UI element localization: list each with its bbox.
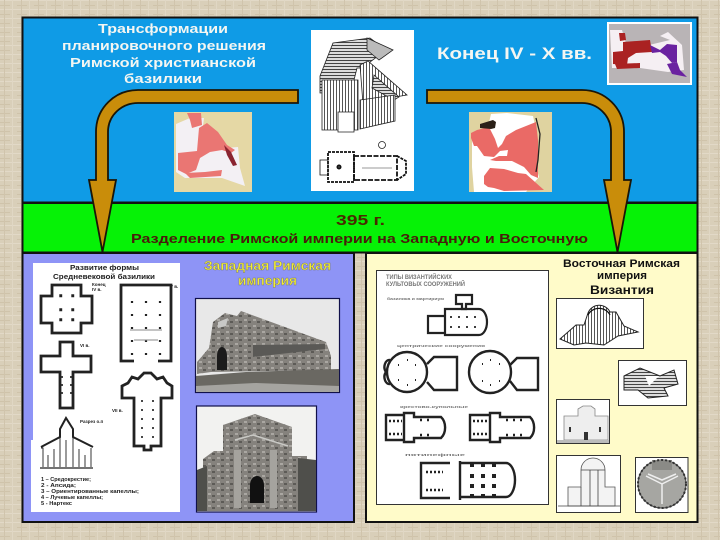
plans sheet: medieval basilica (31, 263, 180, 512)
sheet heading: ТИПЫ ВИЗАНТИЙСКИХ (386, 273, 452, 281)
sheet heading (53, 265, 155, 281)
title (62, 22, 266, 86)
legend: 4 – Лучевые капеллы; (41, 495, 103, 501)
sheet heading: базилика и мартириум (387, 296, 444, 301)
sheet heading: крестово-купольные (400, 404, 469, 409)
legend: 3 – Ориентированные капеллы; (41, 489, 139, 495)
image: church facade (556, 400, 610, 444)
drawing: basilica perspective (320, 38, 407, 148)
plan: central cross (41, 285, 92, 333)
division text: Разделение Римской империи на Западную и Восточную (131, 232, 588, 246)
plan: basilica with martyrium (428, 295, 487, 335)
plan: cross-domed church right (470, 413, 534, 442)
plan period labels: Конец (92, 282, 106, 287)
date heading: 395 г. (336, 212, 385, 229)
plan period labels (80, 282, 178, 424)
legend: 1 – Средокрестие; (41, 477, 91, 483)
image: domed church sketch (556, 298, 644, 348)
heading: eastern empire (563, 258, 680, 297)
sheet heading: центрические сооружения (397, 343, 486, 348)
image: monastery complex sketch (618, 360, 686, 406)
plan: radial chapels (122, 373, 172, 450)
sheet heading (386, 273, 486, 457)
image: octagonal plan (636, 458, 688, 512)
map: divided empire (469, 112, 552, 192)
legend: 5 - Нартекс (41, 501, 72, 507)
panel: green band (22, 203, 698, 252)
map: top right empire (607, 22, 692, 85)
sheet heading: КУЛЬТОВЫХ СООРУЖЕНИЙ (386, 280, 465, 288)
plans sheet: byzantine churches (376, 270, 548, 504)
plan period labels: VII в. (112, 408, 123, 413)
drawing: section (40, 418, 93, 468)
plan period labels: Разрез о.п (80, 419, 103, 424)
plan: five-nave church (421, 461, 515, 500)
heading: eastern empire: империя (597, 270, 647, 282)
title: базилики (124, 72, 202, 86)
plan: cross-domed church left (386, 413, 445, 442)
heading: eastern empire: Византия (590, 283, 654, 297)
arrow: right downward (427, 90, 631, 252)
panel: western empire (22, 253, 354, 522)
heading: western empire (204, 259, 331, 288)
plan period labels: V в. (170, 284, 178, 289)
heading: eastern empire: Восточная Римская (563, 258, 680, 270)
plan: octagon church left (384, 352, 457, 392)
plan period labels: IV в. (92, 287, 102, 292)
plan period labels: VI в. (80, 343, 90, 348)
title: Римской христианской (70, 56, 256, 70)
plan: rectangular hall (121, 285, 171, 361)
plan: latin cross (41, 342, 91, 408)
legend: 2 - Апсида; (41, 483, 76, 489)
arrow: left downward (89, 90, 298, 252)
drawing: basilica plan (320, 152, 406, 182)
heading: western empire: империя (238, 274, 297, 288)
map: western empire (174, 112, 252, 192)
panel: blue top section (22, 18, 698, 202)
legend (41, 477, 139, 507)
photo: stone church (196, 406, 316, 512)
image: basilica section and plan (311, 30, 414, 191)
image: domed church section (556, 456, 620, 512)
panel: eastern empire (366, 253, 698, 522)
sheet heading: Развитие формы (70, 265, 139, 272)
photo: long basilica (196, 298, 340, 392)
period heading: Конец IV - X вв. (437, 45, 592, 63)
heading: western empire: Западная Римская (204, 259, 331, 273)
title: Трансформации (98, 22, 228, 36)
sheet heading: пятинефные (405, 452, 467, 457)
title: планировочного решения (62, 39, 266, 53)
sheet heading: Средневековой базилики (53, 273, 155, 281)
plan: octagon church right (469, 351, 538, 393)
